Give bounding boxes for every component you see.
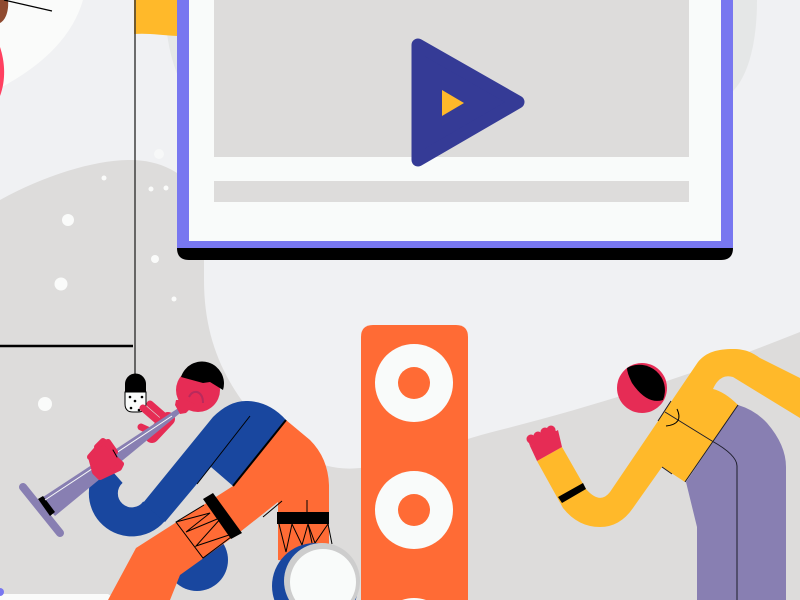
head [617, 363, 667, 413]
microphone cable [134, 0, 136, 375]
microphone [125, 374, 146, 412]
background: grey ground shape [0, 160, 800, 600]
horizontal black line [0, 345, 133, 347]
left musician playing clarinet [23, 362, 332, 600]
upper speaker cone [375, 344, 453, 422]
hair [627, 365, 665, 401]
blue arm curve [103, 472, 155, 522]
torso detail line [197, 416, 250, 484]
yellow body and arm [537, 349, 800, 527]
lower speaker cone [402, 598, 426, 600]
blue torso and upper arm [143, 401, 286, 522]
background: white floor strip [0, 594, 118, 600]
clarinet bell [23, 487, 60, 533]
orange trousers [108, 420, 329, 600]
top left figure fragment [0, 0, 52, 96]
upper hand [141, 404, 168, 436]
right musician [526, 349, 800, 600]
zigzag lines on thigh [176, 505, 231, 558]
clarinet band [38, 496, 55, 516]
speaker cabinet [361, 325, 468, 600]
yellow flag [134, 0, 178, 36]
ear [189, 392, 203, 403]
fist [526, 426, 562, 461]
video screen [214, 0, 689, 157]
monitor frame [177, 0, 733, 248]
purple trousers [686, 405, 786, 600]
blue ball behind leg [166, 529, 228, 591]
knee band [203, 493, 242, 539]
mouth [175, 400, 195, 414]
clarinet highlight [45, 416, 172, 500]
speaker [361, 325, 468, 600]
calf band [277, 512, 329, 524]
purple object corner [0, 588, 4, 596]
drum [272, 543, 360, 600]
wrist band [558, 483, 586, 503]
background: white blob top left [0, 0, 83, 88]
collar arc [666, 409, 679, 426]
crease line on leg [263, 501, 282, 517]
play button [418, 45, 518, 160]
hair [181, 362, 224, 390]
middle speaker cone [375, 471, 453, 549]
play button inner triangle [442, 90, 464, 116]
head [176, 368, 220, 412]
background: light blob behind monitor [165, 0, 757, 100]
zigzag lines on calf [279, 500, 332, 552]
caption bar [214, 181, 689, 202]
waist line [233, 420, 286, 486]
monitor interior [189, 0, 721, 241]
torso detail lines [658, 401, 738, 600]
lower hand [90, 441, 121, 477]
monitor base shadow [177, 240, 733, 260]
clarinet body [40, 405, 185, 516]
video monitor [177, 0, 733, 260]
snow dots [38, 149, 176, 411]
